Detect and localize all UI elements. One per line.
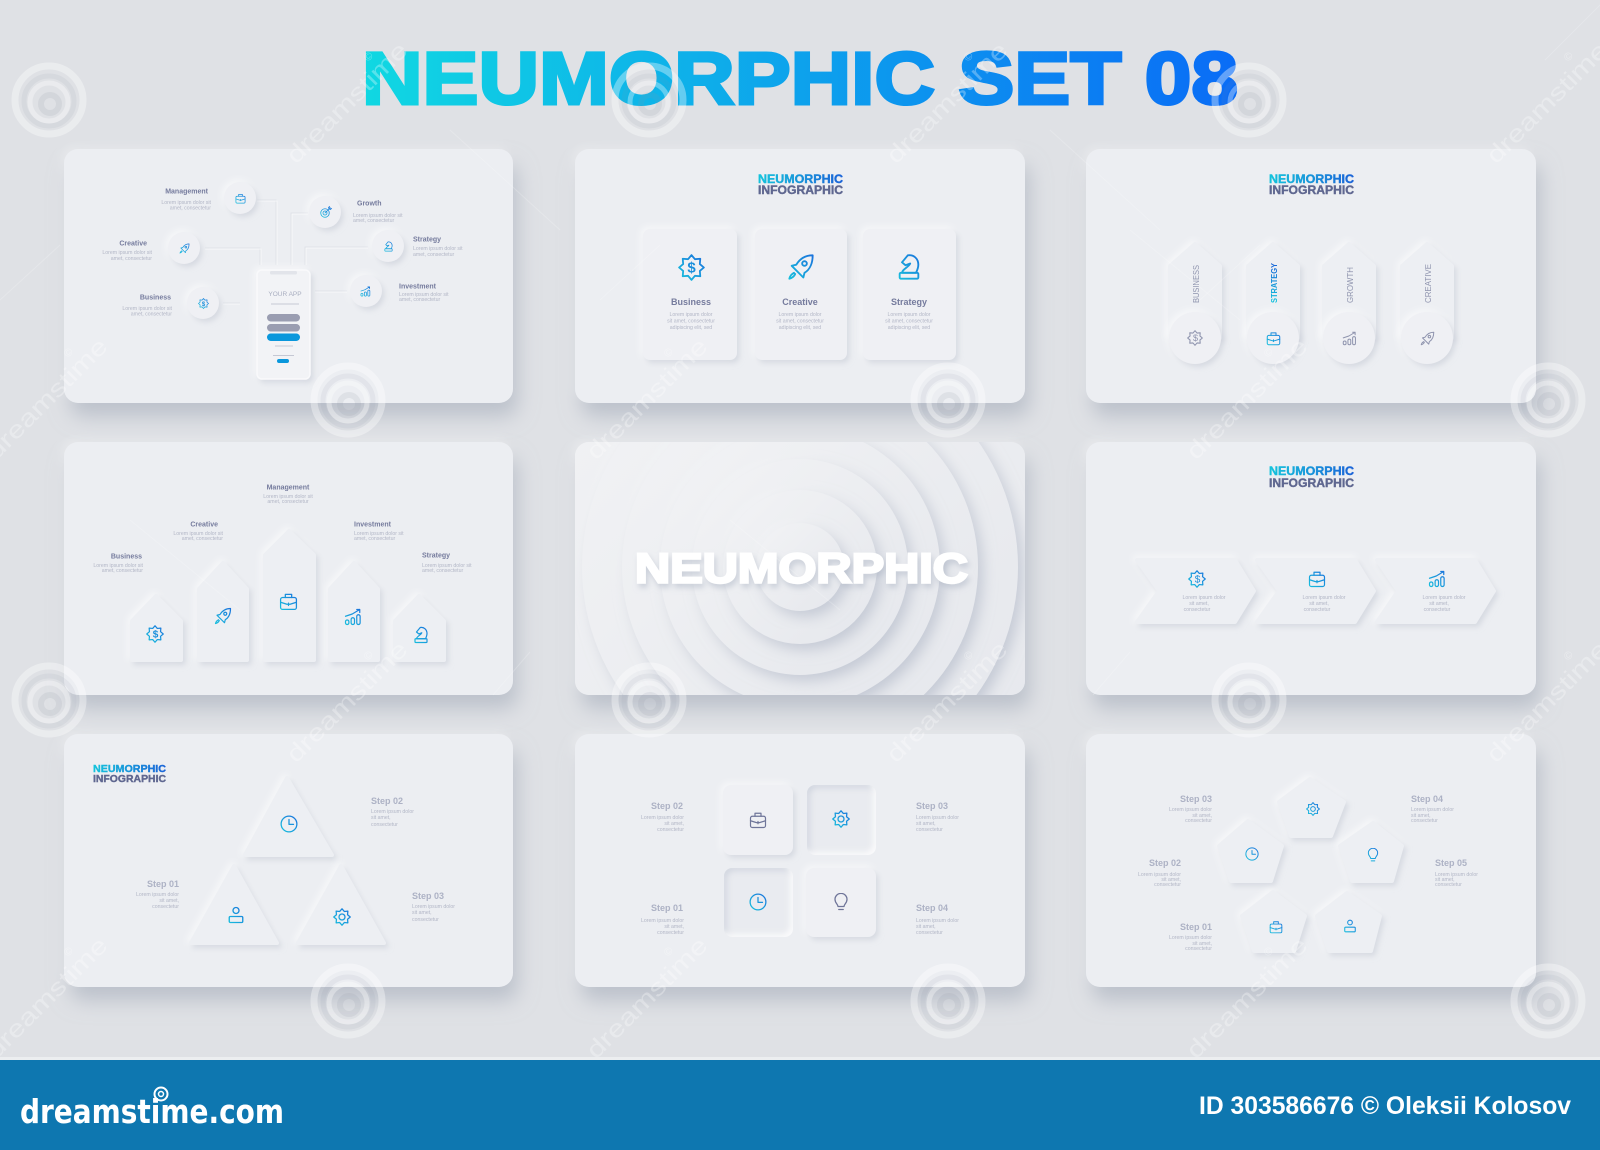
node: Strategy: amet, consectetur xyxy=(413,252,455,258)
triangle: Step 03 xyxy=(298,866,455,943)
phone mockup: YOUR APP xyxy=(268,291,302,298)
watermark overlay: © xyxy=(662,346,676,360)
watermark overlay: dreamstime xyxy=(1181,333,1313,465)
card: Business: sit amet, consectetur xyxy=(667,318,715,324)
card: Creative: Creative xyxy=(782,297,818,307)
pentagon: Step 03 top: Lorem ipsum dolor xyxy=(1169,807,1212,813)
pentagon: Step 05 right: Step 05 xyxy=(1435,858,1467,868)
triangle: Step 03: consectetur xyxy=(412,917,439,923)
footer bar xyxy=(0,1057,1600,1150)
heading: NEUMORPHIC xyxy=(93,763,166,775)
watermark overlay: © xyxy=(962,50,976,64)
bar: Creative: Creative xyxy=(190,522,218,528)
node: Creative xyxy=(102,232,200,264)
pentagon: Step 05 right: sit amet, xyxy=(1435,877,1455,883)
footer credit: ID 303586676 © Oleksii Kolosov xyxy=(1199,1092,1571,1120)
chevron 1: Lorem ipsum dolor xyxy=(1183,595,1226,601)
pentagon: Step 02 left: consectetur xyxy=(1154,882,1181,888)
node: Business: $ xyxy=(202,302,206,308)
triangle: Step 01: Step 01 xyxy=(147,879,179,889)
tile: Step 03 inset: Step 03 xyxy=(916,801,948,811)
bar: Management: Management xyxy=(267,484,310,492)
heading: NEUMORPHIC xyxy=(1269,464,1354,478)
panel: three cards xyxy=(575,149,1025,403)
chevron 2: sit amet, xyxy=(1309,601,1329,607)
tile: Step 01 inset xyxy=(641,868,793,937)
node: Growth: Lorem ipsum dolor sit xyxy=(353,213,403,219)
watermark overlay: © xyxy=(962,649,976,663)
pentagon: Step 01 lower left: consectetur xyxy=(1185,946,1212,952)
card: Business: Lorem ipsum dolor xyxy=(670,312,713,318)
tile: Step 02 raised: consectetur xyxy=(657,827,684,833)
tile: Step 04 raised: Step 04 xyxy=(916,903,948,913)
card: Creative: adipiscing elit, sed xyxy=(779,325,821,331)
pentagon: Step 01 lower left: sit amet, xyxy=(1192,941,1212,947)
arrow: Business: $ xyxy=(1193,333,1198,343)
pentagon: Step 05 right xyxy=(1340,823,1478,888)
panel: square grid xyxy=(575,734,1025,987)
phone mockup xyxy=(257,270,310,379)
watermark overlay: dreamstime xyxy=(1481,37,1600,169)
chevron 1 xyxy=(1137,560,1254,622)
chevron 1: $ xyxy=(1195,574,1201,586)
node: Strategy xyxy=(372,230,463,262)
triangle: Step 02: consectetur xyxy=(371,822,398,828)
node: Investment xyxy=(350,275,449,307)
watermark overlay: dreamstime xyxy=(1181,932,1313,1064)
watermark overlay: dreamstime xyxy=(581,333,713,465)
bar: Creative: amet, consectetur xyxy=(182,536,223,542)
node: Business: amet, consectetur xyxy=(131,312,172,318)
tile: Step 04 raised: consectetur xyxy=(916,930,943,936)
arrow: Business xyxy=(1169,244,1221,364)
bar: Management: Lorem ipsum dolor sit xyxy=(263,494,313,500)
heading xyxy=(1269,172,1354,197)
watermark overlay: © xyxy=(1262,945,1276,959)
pentagon: Step 04 lower right: sit amet, xyxy=(1411,813,1431,819)
chevron 1: sit amet, xyxy=(1189,601,1209,607)
triangle: Step 02: Lorem ipsum dolor xyxy=(371,809,414,815)
bar: Management: amet, consectetur xyxy=(267,499,309,505)
panel: house bars xyxy=(64,442,513,695)
bar: Management xyxy=(263,484,314,660)
node: Creative: Creative xyxy=(119,240,147,248)
triangle: Step 01: Lorem ipsum dolor xyxy=(136,892,179,898)
heading xyxy=(1269,464,1354,490)
bar: Investment: Investment xyxy=(354,522,392,528)
node: Business xyxy=(122,287,219,319)
bar: Business xyxy=(93,554,181,660)
chevron 2: Lorem ipsum dolor xyxy=(1303,595,1346,601)
card: Creative: sit amet, consectetur xyxy=(776,318,824,324)
tile: Step 01 inset: Lorem ipsum dolor xyxy=(641,918,684,924)
node: Growth: Growth xyxy=(357,200,382,208)
pentagon: Step 03 top: sit amet, xyxy=(1192,813,1212,819)
pentagon: Step 03 top xyxy=(1169,779,1344,836)
arrow: Growth xyxy=(1323,244,1375,364)
tile: Step 02 raised: Step 02 xyxy=(651,801,683,811)
bar: Investment: Lorem ipsum dolor sit xyxy=(354,531,404,537)
chevron 3: sit amet, xyxy=(1429,601,1449,607)
node: Growth xyxy=(309,196,403,228)
tile: Step 02 raised: sit amet, xyxy=(664,821,684,827)
pentagon: Step 02 left: sit amet, xyxy=(1161,877,1181,883)
bar: Investment xyxy=(330,522,404,660)
bar: Investment: amet, consectetur xyxy=(354,536,396,542)
triangle: Step 03: Step 03 xyxy=(412,891,444,901)
pentagon: Step 04 lower right xyxy=(1317,794,1454,951)
node: Management: Management xyxy=(165,188,209,196)
watermark overlay: © xyxy=(1562,50,1576,64)
pentagon: Step 05 right: Lorem ipsum dolor xyxy=(1435,872,1478,878)
triangle: Step 02: sit amet, xyxy=(371,815,391,821)
tile: Step 01 inset: consectetur xyxy=(657,930,684,936)
arrow: Business: BUSINESS xyxy=(1192,265,1201,303)
tile: Step 03 inset: sit amet, xyxy=(916,821,936,827)
card: Strategy: Strategy xyxy=(891,297,927,307)
card: Creative xyxy=(755,229,847,360)
watermark overlay: © xyxy=(1262,346,1276,360)
arrow: Strategy xyxy=(1247,244,1299,364)
panel: vertical arrows xyxy=(1086,149,1536,403)
arrow: Growth: GROWTH xyxy=(1346,267,1355,303)
pentagon: Step 02 left: Lorem ipsum dolor xyxy=(1138,872,1181,878)
tile: Step 04 raised xyxy=(806,868,959,937)
watermark overlay: dreamstime xyxy=(281,636,413,768)
tile: Step 03 inset: consectetur xyxy=(916,827,943,833)
pentagon: Step 01 lower left: Lorem ipsum dolor xyxy=(1169,935,1212,941)
pentagon: Step 04 lower right: Step 04 xyxy=(1411,794,1443,804)
node: Investment: Lorem ipsum dolor sit xyxy=(399,292,449,298)
chevron 1: consectetur xyxy=(1184,607,1211,613)
watermark overlay: © xyxy=(662,945,676,959)
heading: INFOGRAPHIC xyxy=(93,773,166,785)
tile: Step 02 raised: Lorem ipsum dolor xyxy=(641,815,684,821)
card: Strategy: sit amet, consectetur xyxy=(885,318,933,324)
tile: Step 04 raised: sit amet, xyxy=(916,924,936,930)
bar: Strategy: Lorem ipsum dolor sit xyxy=(422,563,472,569)
triangle: Step 02: Step 02 xyxy=(371,796,403,806)
chevron 2 xyxy=(1257,560,1374,622)
pentagon: Step 01 lower left xyxy=(1169,892,1305,952)
triangle: Step 02 xyxy=(245,778,414,855)
panel: app connections xyxy=(64,149,513,403)
pentagon: Step 01 lower left: Step 01 xyxy=(1180,922,1212,932)
card: Business: adipiscing elit, sed xyxy=(670,325,712,331)
chevron 3: consectetur xyxy=(1424,607,1451,613)
pentagon: Step 03 top: Step 03 xyxy=(1180,794,1212,804)
node: Investment: Investment xyxy=(399,284,437,290)
heading: NEUMORPHIC xyxy=(1269,172,1354,186)
node: Creative: Lorem ipsum dolor sit xyxy=(102,250,153,256)
card: Business xyxy=(643,229,737,360)
panel: triangles xyxy=(64,734,513,987)
concentric circles xyxy=(584,442,1025,695)
pentagon: Step 02 left: Step 02 xyxy=(1149,858,1181,868)
bar: Business: Business xyxy=(111,554,142,560)
watermark overlay: dreamstime xyxy=(881,636,1013,768)
tile: Step 03 inset: Lorem ipsum dolor xyxy=(916,815,959,821)
card: Strategy: Lorem ipsum dolor xyxy=(888,312,931,318)
pentagon: Step 03 top: consectetur xyxy=(1185,818,1212,824)
watermark overlay: © xyxy=(62,945,76,959)
pentagon: Step 04 lower right: consectetur xyxy=(1411,818,1438,824)
heading: INFOGRAPHIC xyxy=(758,183,843,197)
watermark overlay: dreamstime xyxy=(881,37,1013,169)
watermark overlay: © xyxy=(362,649,376,663)
tile: Step 01 inset: sit amet, xyxy=(664,924,684,930)
pentagon: Step 04 lower right: Lorem ipsum dolor xyxy=(1411,807,1454,813)
heading: INFOGRAPHIC xyxy=(1269,183,1354,197)
node: Business: Lorem ipsum dolor sit xyxy=(122,306,173,312)
bar: Strategy: amet, consectetur xyxy=(422,568,464,574)
node: Management: Lorem ipsum dolor sit xyxy=(161,200,212,206)
node: Strategy: Lorem ipsum dolor sit xyxy=(413,246,463,252)
card: Strategy: adipiscing elit, sed xyxy=(888,325,930,331)
heading xyxy=(758,172,843,197)
node: Strategy: Strategy xyxy=(413,236,441,244)
node: Growth: amet, consectetur xyxy=(353,218,395,224)
tile: Step 03 inset xyxy=(807,785,959,855)
arrow: Strategy: STRATEGY xyxy=(1270,262,1279,303)
watermark overlay: © xyxy=(1562,649,1576,663)
arrow: Creative xyxy=(1401,244,1453,364)
bar: Creative: Lorem ipsum dolor sit xyxy=(173,531,224,537)
watermark overlay: © xyxy=(62,346,76,360)
panel: neumorphic cover xyxy=(575,442,1037,716)
watermark overlay: © xyxy=(362,50,376,64)
arrow: Creative: CREATIVE xyxy=(1424,264,1433,303)
footer logo: dreamstime.com xyxy=(20,1092,284,1131)
triangle: Step 01: consectetur xyxy=(152,904,179,910)
node: Creative: amet, consectetur xyxy=(111,256,152,262)
bar: Creative xyxy=(173,522,247,660)
chevron 3 xyxy=(1377,560,1494,622)
card: Creative: Lorem ipsum dolor xyxy=(779,312,822,318)
triangle: Step 01: sit amet, xyxy=(159,898,179,904)
tile: Step 01 inset: Step 01 xyxy=(651,903,683,913)
bar: Business: $ xyxy=(153,630,159,640)
card: Business: $ xyxy=(687,260,696,276)
heading: NEUMORPHIC xyxy=(758,172,843,186)
node: Investment: amet, consectetur xyxy=(399,297,441,303)
watermark overlay: dreamstime xyxy=(581,932,713,1064)
chevron 3: Lorem ipsum dolor xyxy=(1423,595,1466,601)
card: Business: Business xyxy=(671,297,711,307)
heading xyxy=(93,763,166,785)
bar: Strategy xyxy=(395,552,472,660)
pentagon: Step 05 right: consectetur xyxy=(1435,882,1462,888)
card: Strategy xyxy=(863,229,956,360)
node: Business: Business xyxy=(140,294,171,302)
title: NEUMORPHIC SET 08 xyxy=(362,37,1238,120)
tile: Step 04 raised: Lorem ipsum dolor xyxy=(916,918,959,924)
watermark overlay: dreamstime xyxy=(1481,636,1600,768)
triangle: Step 03: sit amet, xyxy=(412,910,432,916)
node: Management: amet, consectetur xyxy=(170,206,211,212)
pentagon: Step 02 left xyxy=(1138,821,1282,888)
panel: pentagons xyxy=(1086,734,1536,987)
chevron 2: consectetur xyxy=(1304,607,1331,613)
cover text: NEUMORPHIC xyxy=(635,544,968,592)
node: Management xyxy=(161,182,256,214)
bar: Business: amet, consectetur xyxy=(102,568,143,574)
panel: chevrons xyxy=(1086,442,1536,695)
heading: INFOGRAPHIC xyxy=(1269,476,1354,490)
tile: Step 02 raised xyxy=(641,785,793,855)
bar: Strategy: Strategy xyxy=(422,552,450,560)
watermark overlay: dreamstime xyxy=(281,37,413,169)
bar: Business: Lorem ipsum dolor sit xyxy=(93,563,144,569)
triangle: Step 01 xyxy=(136,866,277,943)
triangle: Step 03: Lorem ipsum dolor xyxy=(412,904,455,910)
